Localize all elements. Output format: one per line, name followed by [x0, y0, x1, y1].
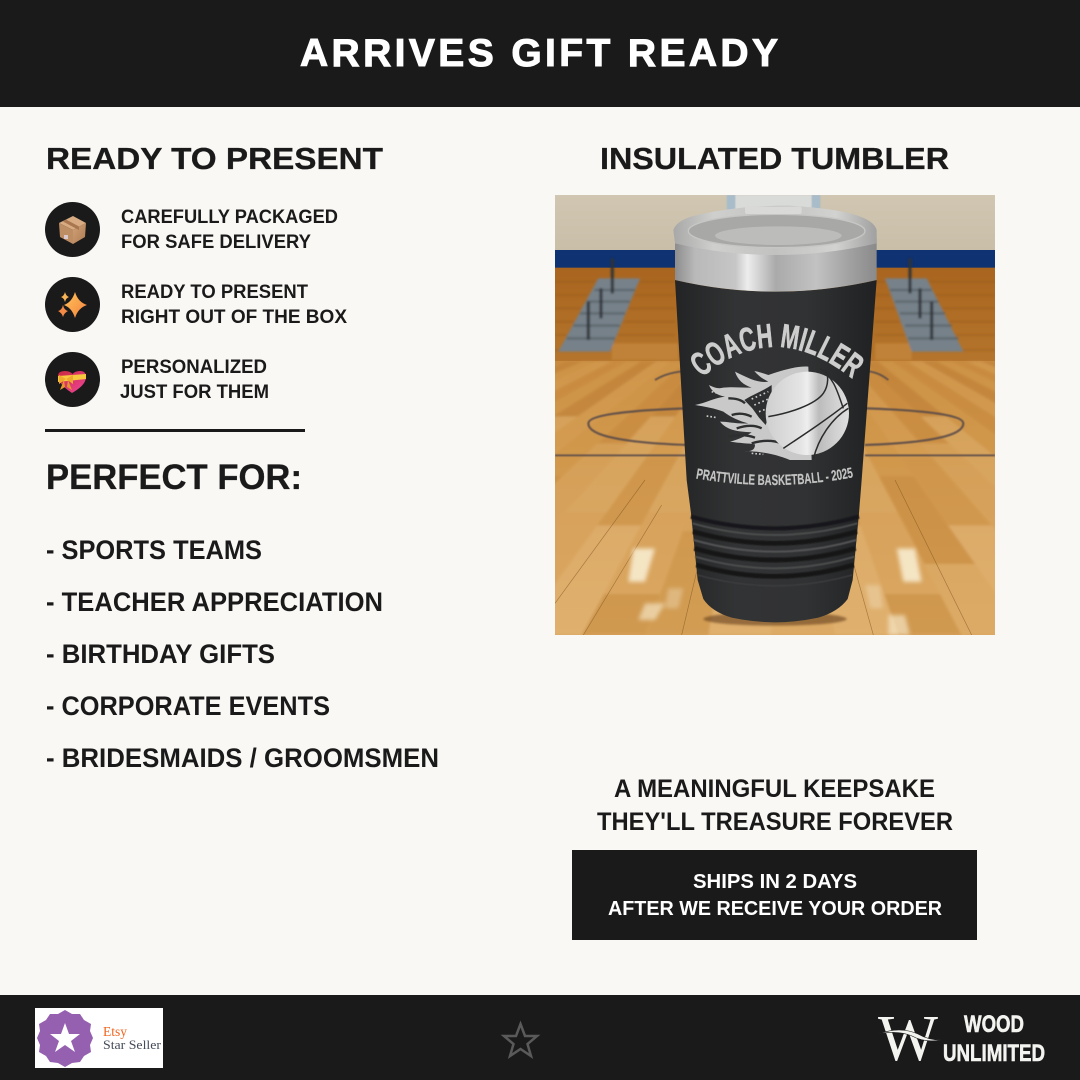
footer	[0, 995, 1080, 1080]
audience list: - CORPORATE EVENTS	[46, 691, 330, 721]
text: personalized: PERSONALIZED	[121, 357, 267, 378]
icon: sparkles	[45, 277, 100, 332]
product photo: tumbler on gym floor	[555, 195, 995, 635]
text: personalized: JUST FOR THEM	[120, 382, 269, 403]
gym background	[555, 195, 995, 363]
shipping callout: SHIPS IN 2 DAYS	[693, 871, 857, 893]
icon: package	[45, 202, 100, 257]
keepsake message	[597, 775, 953, 836]
logo: wood unlimited: WOOD	[964, 1011, 1024, 1038]
tumbler shadow	[703, 612, 847, 626]
tumbler ribs	[691, 517, 859, 586]
logo: wood unlimited: UNLIMITED	[943, 1040, 1045, 1067]
lid	[673, 206, 877, 255]
court lines	[555, 371, 995, 455]
badge: etsy star seller: Etsy	[103, 1024, 127, 1039]
engraving: name: COACH MILLER	[691, 324, 864, 379]
audience list: - TEACHER APPRECIATION	[46, 587, 383, 617]
text: ready to present	[121, 282, 347, 328]
wooden bench lines	[556, 308, 994, 350]
header banner	[0, 0, 1080, 107]
badge: etsy star seller	[35, 1008, 163, 1068]
benefits list	[45, 202, 347, 407]
text: ready to present: RIGHT OUT OF THE BOX	[121, 307, 347, 328]
text: personalized	[120, 357, 269, 403]
shipping callout	[572, 850, 977, 940]
tumbler	[673, 206, 877, 622]
floor reflections	[628, 548, 922, 635]
shipping callout: AFTER WE RECEIVE YOUR ORDER	[608, 898, 943, 920]
audience list: - BIRTHDAY GIFTS	[46, 639, 275, 669]
logo mark: W	[878, 1002, 939, 1075]
heading: perfect for: PERFECT FOR:	[46, 458, 302, 497]
icon: gift heart	[45, 352, 100, 407]
keepsake message: A MEANINGFUL KEEPSAKE	[614, 775, 935, 803]
audience list: - SPORTS TEAMS	[46, 535, 262, 565]
text: carefully packaged: FOR SAFE DELIVERY	[121, 232, 311, 253]
audience list	[46, 535, 439, 773]
audience list: - BRIDESMAIDS / GROOMSMEN	[46, 743, 439, 773]
heading: ready to present: READY TO PRESENT	[46, 141, 383, 176]
logo: wood unlimited	[878, 1002, 1045, 1075]
wood floor	[555, 361, 995, 635]
engraving: flaming basketball	[695, 367, 849, 460]
keepsake message: THEY'LL TREASURE FOREVER	[597, 808, 953, 836]
title: ARRIVES GIFT READY	[300, 32, 778, 75]
plank seams	[555, 480, 972, 635]
text: carefully packaged	[121, 207, 338, 253]
steel ring	[675, 238, 877, 292]
icon: outlined star	[504, 1024, 537, 1056]
text: ready to present: READY TO PRESENT	[121, 282, 308, 303]
text: carefully packaged: CAREFULLY PACKAGED	[121, 207, 338, 228]
badge: etsy star seller: Star Seller	[103, 1037, 162, 1052]
heading: insulated tumbler: INSULATED TUMBLER	[600, 141, 949, 176]
icon: purple seal	[37, 1010, 93, 1067]
engraving: team line: PRATTVILLE BASKETBALL - 2025	[696, 467, 853, 486]
